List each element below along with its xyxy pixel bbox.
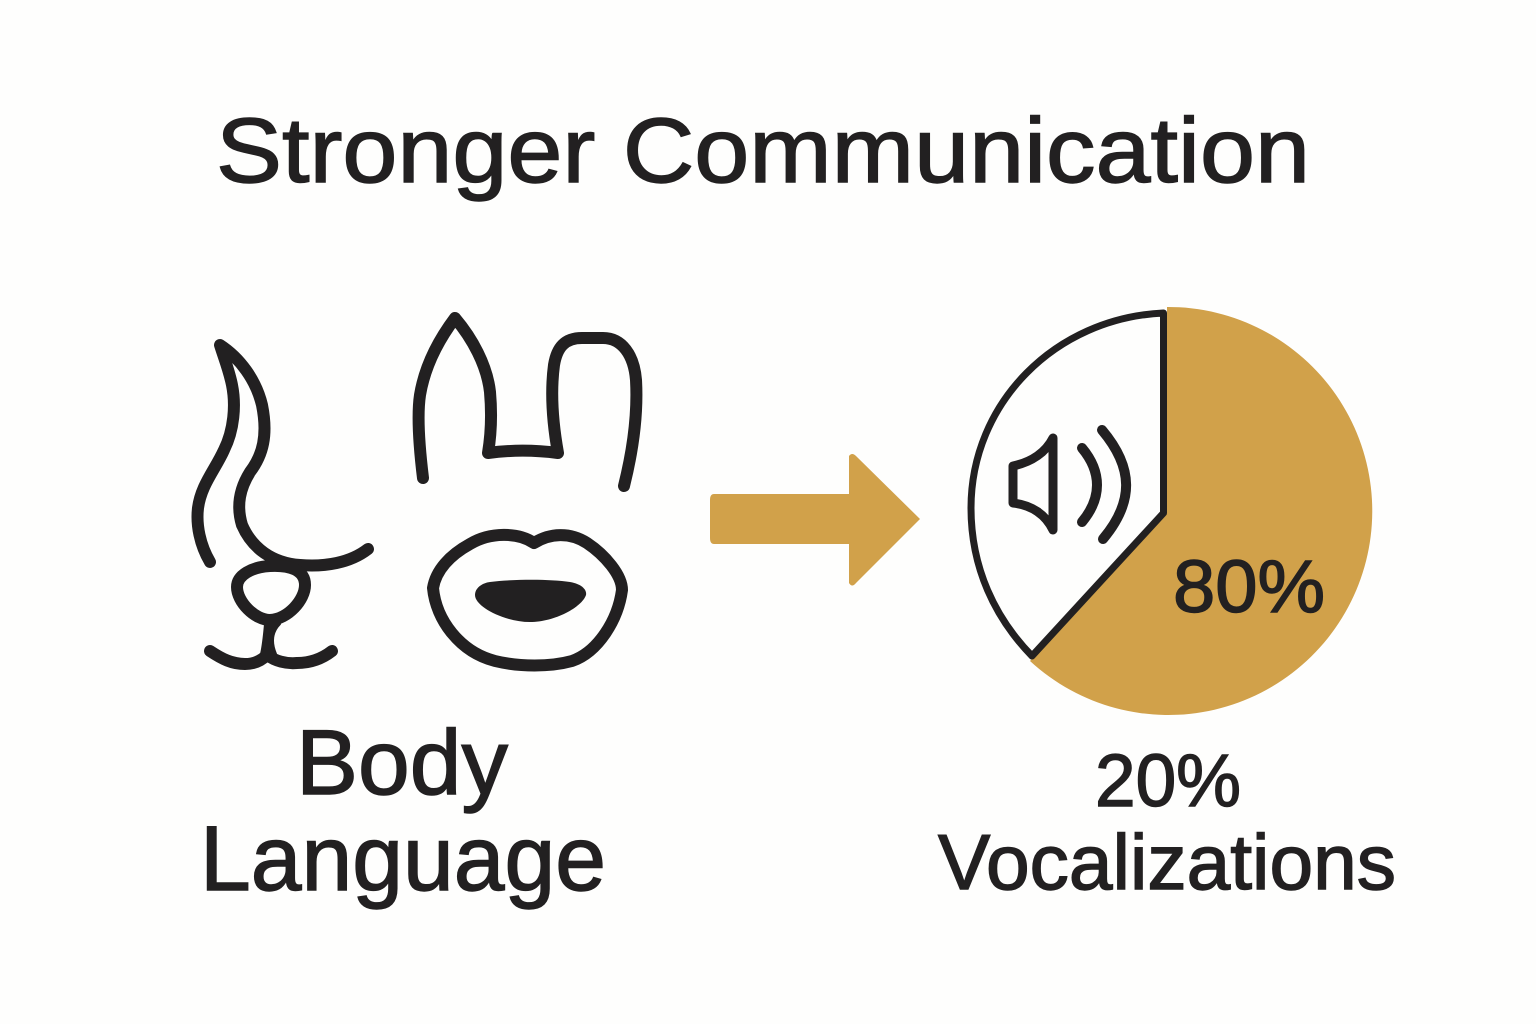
icon: speaker xyxy=(1013,430,1126,539)
pie slice: 80% xyxy=(1030,307,1372,715)
icon: tail xyxy=(198,345,368,565)
icon: mouth xyxy=(433,535,622,666)
pie slice: 20% xyxy=(971,313,1164,656)
label: 20% vocalizations: Vocalizations xyxy=(938,818,1396,906)
icon: ears xyxy=(419,318,636,486)
label: body language xyxy=(200,712,606,910)
label: 20% vocalizations xyxy=(938,739,1396,906)
label: body language: Language xyxy=(200,808,606,910)
title: Stronger Communication xyxy=(216,100,1310,202)
label: 80%: 80% xyxy=(1173,545,1325,628)
arrow xyxy=(710,454,920,586)
label: 20% vocalizations: 20% xyxy=(1095,739,1241,822)
label: body language: Body xyxy=(296,712,508,814)
pie chart xyxy=(971,307,1372,715)
icon: nose and muzzle xyxy=(210,566,332,664)
